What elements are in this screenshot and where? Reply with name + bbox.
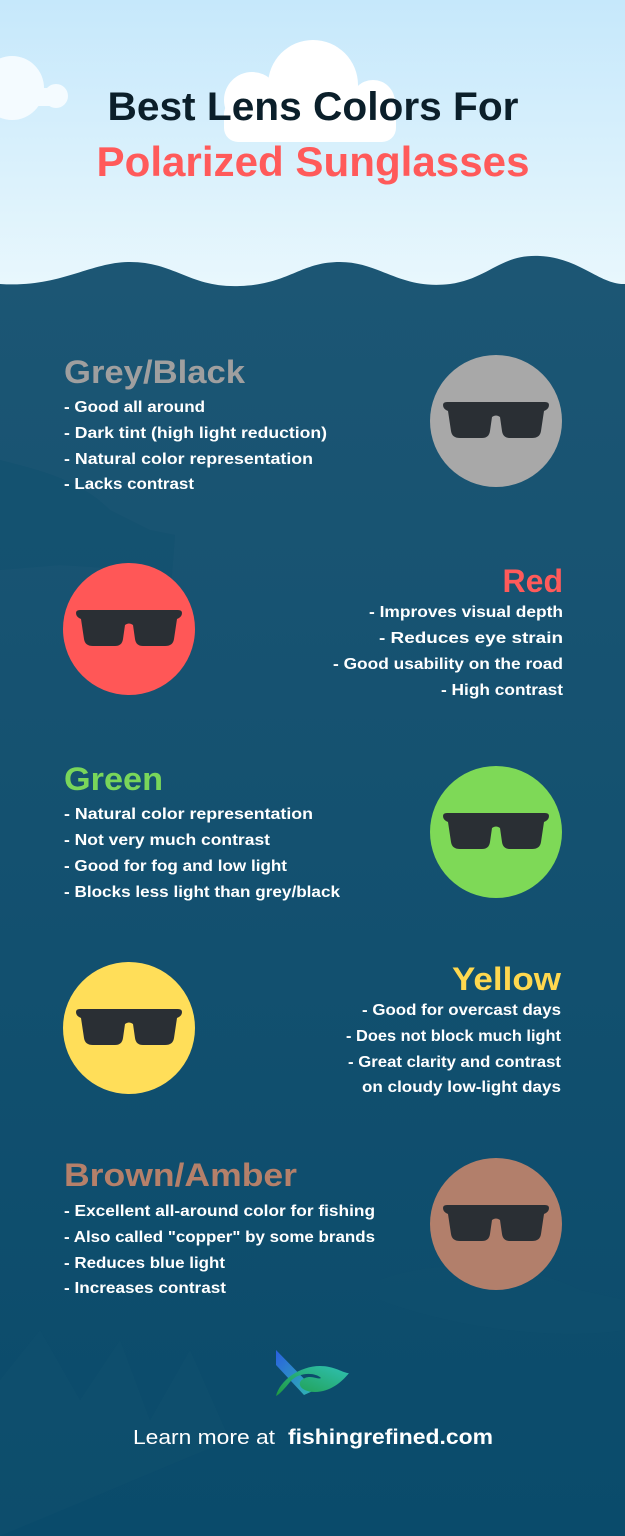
list: grey/black: - Natural color representation [64,451,313,468]
section: brown/amber [64,1157,562,1297]
list: red [333,604,564,699]
heading: Red: Red [503,563,563,599]
section: green [64,761,562,901]
list: brown/amber: - Reduces blue light [64,1255,226,1272]
icon: brown sunglasses [430,1158,562,1290]
list: green: - Not very much contrast [64,832,271,849]
footer: learn more [133,1426,493,1449]
icon: green sunglasses [430,766,562,898]
list: yellow: - Good for overcast days [362,1002,561,1019]
list: green: - Good for fog and low light [64,858,288,875]
title: Best Lens Colors For [108,85,518,129]
list: yellow: on cloudy low-light days [362,1079,561,1096]
list: brown/amber: - Excellent all-around color for fishing [64,1203,375,1220]
list: red: - Good usability on the road [333,656,563,673]
list: red: - Improves visual depth [369,604,563,621]
list: yellow: - Great clarity and contrast [348,1054,562,1071]
list: brown/amber [64,1203,375,1297]
list: grey/black: - Good all around [64,399,205,416]
icon: red sunglasses [63,563,195,695]
heading: Brown/Amber: Brown/Amber [64,1157,297,1193]
heading: Green: Green [64,761,163,797]
sky background [0,0,625,300]
list: brown/amber: - Increases contrast [64,1280,227,1297]
logo: fishing refined [276,1350,349,1396]
list: yellow [346,1002,562,1096]
list: grey/black [64,399,327,493]
list: grey/black: - Lacks contrast [64,476,195,493]
icon: yellow sunglasses [63,962,195,1094]
section: yellow [63,961,562,1096]
cloud center [224,40,396,142]
list: grey/black: - Dark tint (high light reduction) [64,425,327,442]
icon: grey sunglasses [430,355,562,487]
list: yellow: - Does not block much light [346,1028,562,1045]
cloud left [0,56,68,120]
section: red [63,563,564,699]
footer: learn more: fishingrefined.com [288,1426,493,1449]
title: Polarized Sunglasses [96,138,530,185]
list: green: - Natural color representation [64,806,313,823]
heading: Yellow: Yellow [452,961,561,997]
footer: learn more: Learn more at [133,1427,276,1449]
title [96,85,530,185]
list: green: - Blocks less light than grey/black [64,884,340,901]
heading: Grey/Black: Grey/Black [64,354,245,390]
background silhouettes [0,460,625,1536]
list: green [64,806,340,901]
section: grey/black [64,354,562,493]
list: red: - Reduces eye strain [379,630,563,647]
list: red: - High contrast [441,682,564,699]
list: brown/amber: - Also called "copper" by some brands [64,1229,375,1246]
